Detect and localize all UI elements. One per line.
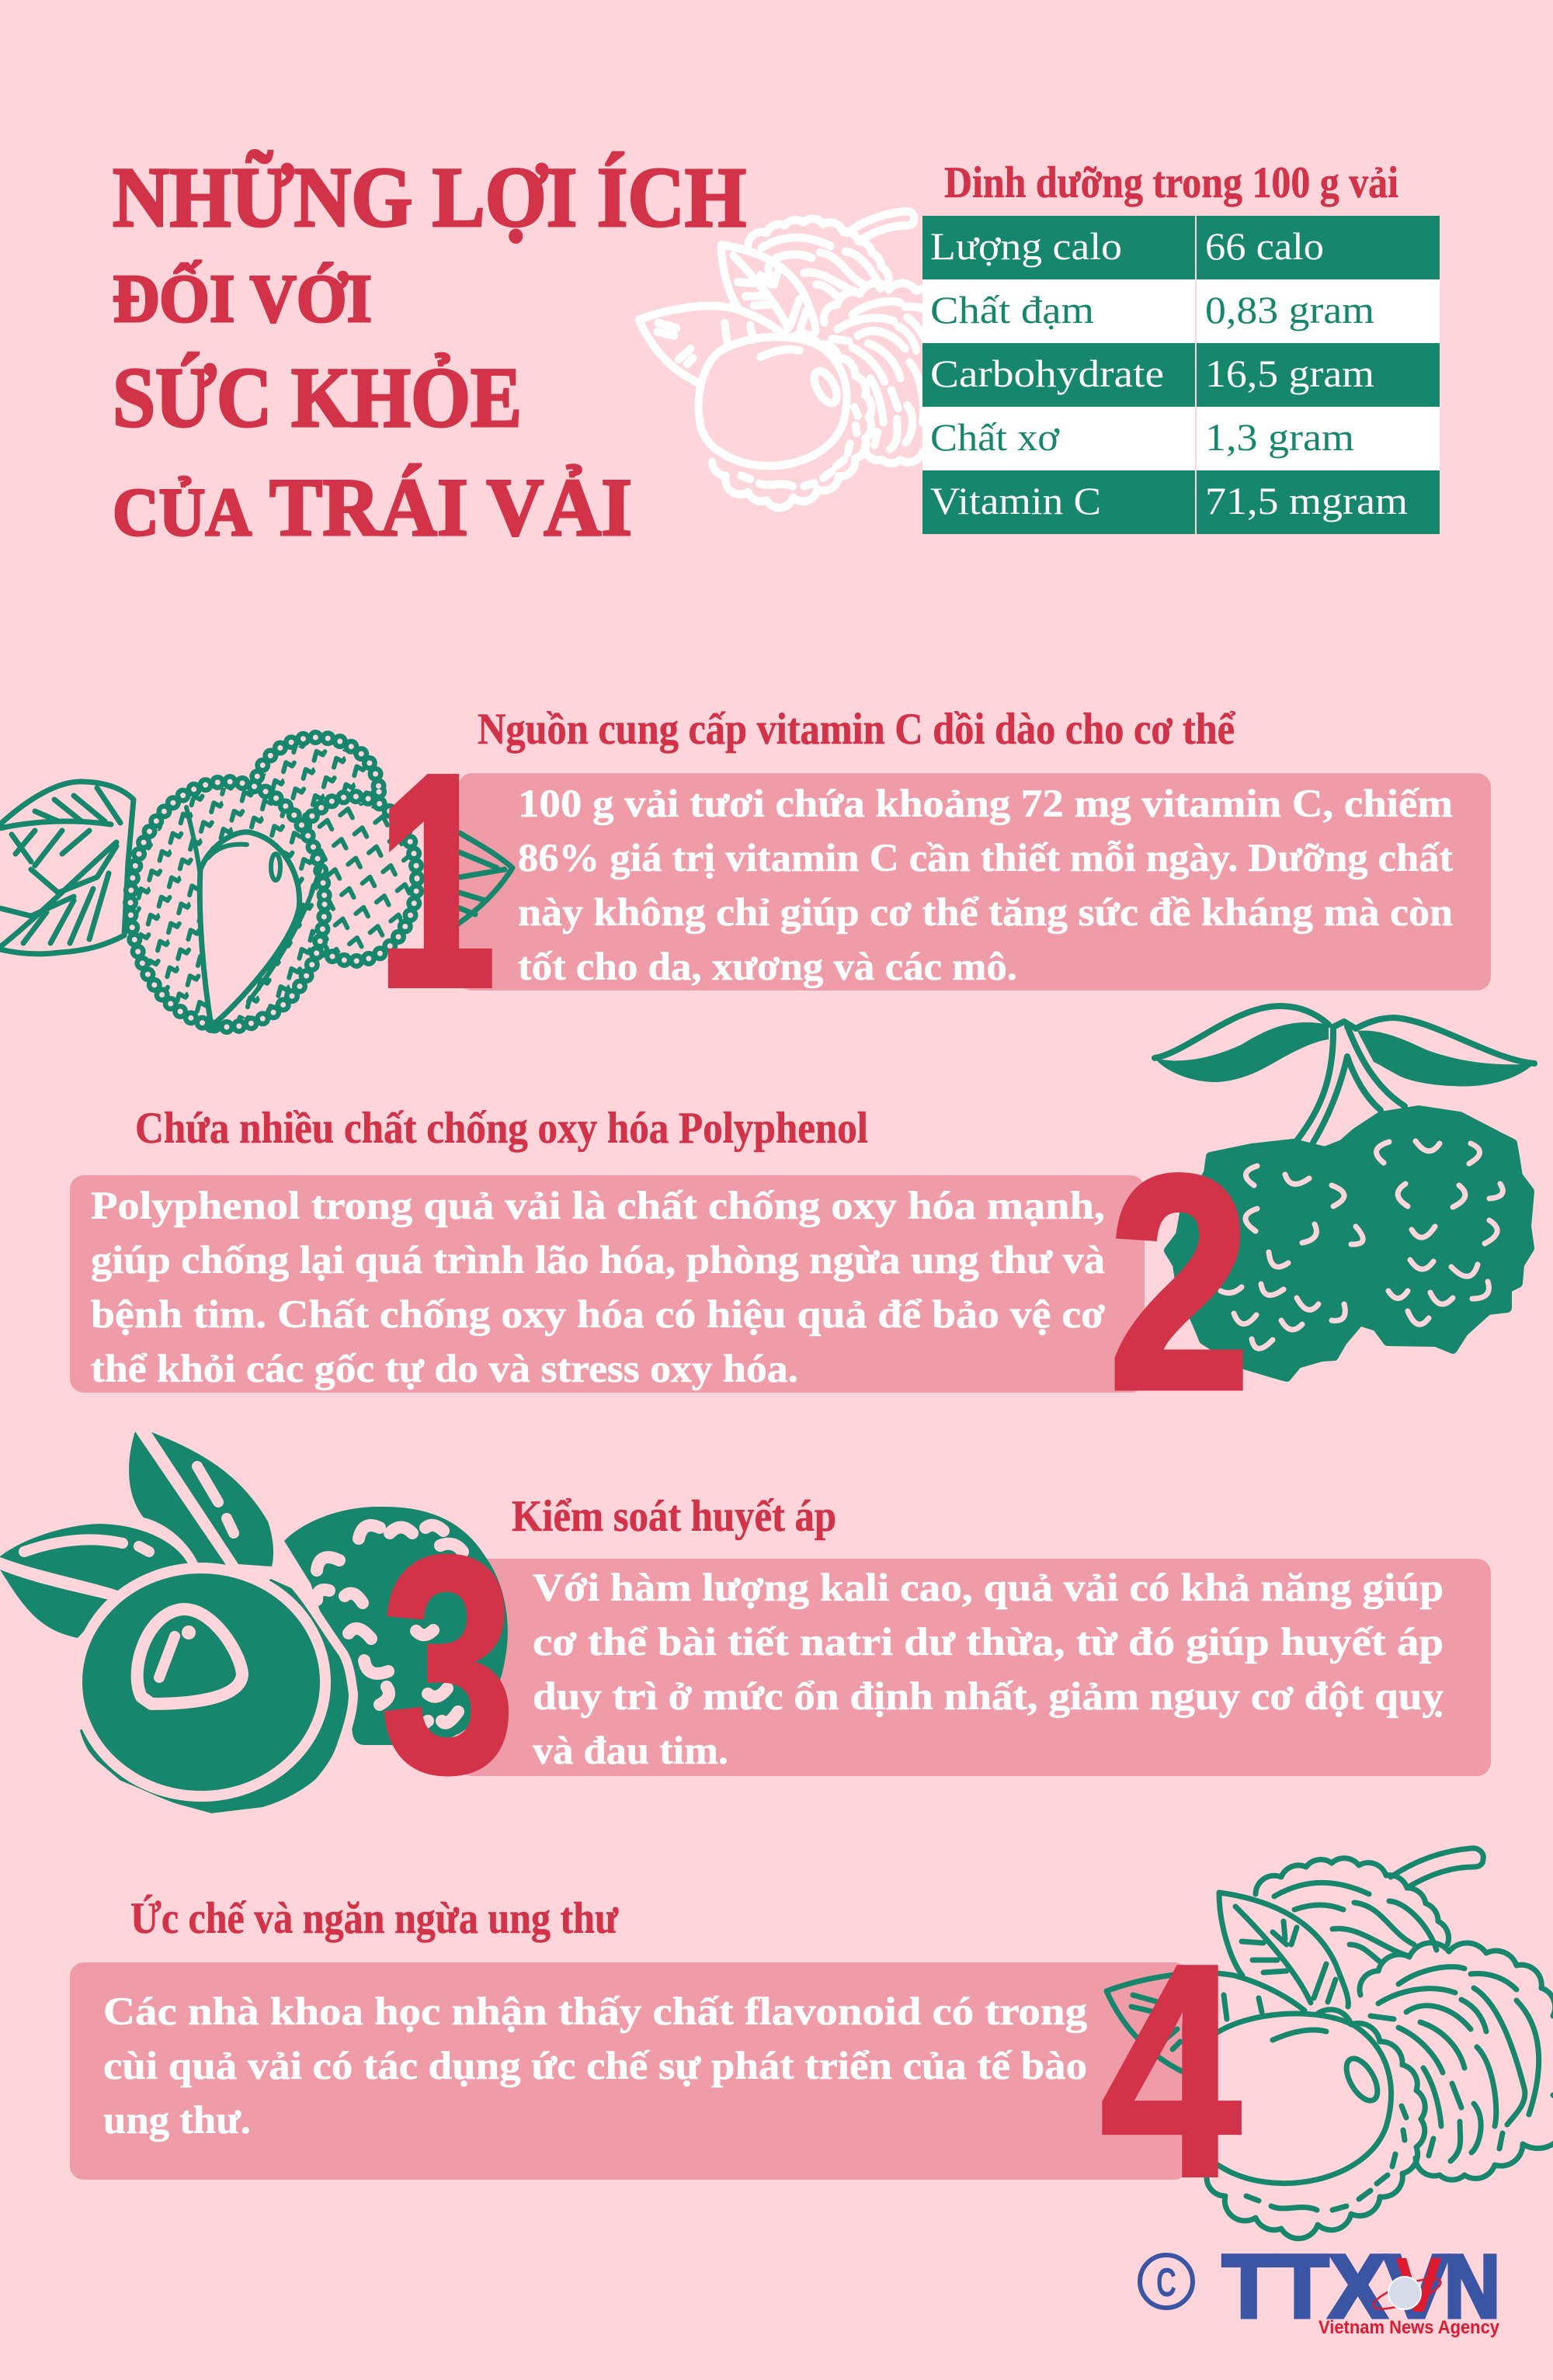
title: [113, 150, 746, 553]
icon: back fruit: [284, 1507, 508, 1745]
icon: lychee flesh: [200, 832, 300, 1026]
logo wordmark: V: [1384, 2237, 1449, 2337]
icon: globe: [1371, 2273, 1444, 2315]
body text 3: duy trì ở mức ổn định nhất, giảm nguy cơ đột quỵ: [533, 1675, 1444, 1719]
table: nutrition per 100 g: 66 calo: [1205, 224, 1324, 268]
heading 3: Kiểm soát huyết áp: [512, 1492, 836, 1541]
heading: nutrition table: Dinh dưỡng trong 100 g vải: [944, 158, 1398, 207]
table: nutrition per 100 g: Vitamin C: [930, 479, 1101, 522]
number 4: 4: [1100, 1901, 1243, 2241]
table: nutrition per 100 g: 71,5 mgram: [1205, 479, 1408, 522]
body text 1: 100 g vải tươi chứa khoảng 72 mg vitamin C, chiếm: [518, 782, 1453, 826]
logo: TTXVN copyright: [1140, 2237, 1500, 2338]
body text 3: và đau tim.: [533, 1729, 728, 1773]
icon: leaves: [0, 1431, 273, 1638]
title: TRÁI VẢI: [269, 462, 632, 553]
table: nutrition per 100 g: Chất xơ: [930, 415, 1060, 459]
number 3: 3: [380, 1493, 516, 1836]
body text 3: Với hàm lượng kali cao, quả vải có khả năng giúp: [533, 1566, 1444, 1610]
panel: section 2: [70, 1006, 1534, 1452]
text box 1: [458, 773, 1491, 991]
body text 4: cùi quả vải có tác dụng ức chế sự phát triển của tế bào: [103, 2045, 1087, 2088]
body text 2: giúp chống lại quá trình lão hóa, phòng ngừa ung thư và: [91, 1239, 1105, 1282]
logo tagline: Vietnam News Agency: [1318, 2317, 1500, 2338]
table: nutrition per 100 g: Chất đạm: [930, 288, 1094, 331]
body text 4: Các nhà khoa học nhận thấy chất flavonoid có trong: [103, 1990, 1087, 2034]
body text 1: này không chỉ giúp cơ thể tăng sức đề kháng mà còn: [518, 891, 1453, 935]
icon: outlined lychee cluster: [1107, 1848, 1553, 2239]
body text 2: thể khỏi các gốc tự do và stress oxy hóa.: [91, 1348, 798, 1391]
icon: white lychee behind the table: [639, 211, 975, 508]
table: nutrition per 100 g: Lượng calo: [930, 224, 1122, 268]
heading 1: Nguồn cung cấp vitamin C dồi dào cho cơ thể: [478, 705, 1235, 754]
body text 1: tốt cho da, xương và các mô.: [518, 945, 1017, 989]
icon: outlined lychee cluster: [0, 737, 512, 1033]
title: ĐỐI VỚI: [113, 259, 372, 337]
body text 1: 86% giá trị vitamin C cần thiết mỗi ngày. Dưỡng chất: [518, 837, 1453, 880]
text box 2: [70, 1175, 1145, 1393]
icon: solid green lychees with leaves: [1155, 1006, 1534, 1377]
heading 2: Chứa nhiều chất chống oxy hóa Polyphenol: [135, 1104, 868, 1153]
body text 2: Polyphenol trong quả vải là chất chống oxy hóa mạnh,: [91, 1185, 1105, 1228]
body text 3: cơ thể bài tiết natri dư thừa, từ đó giúp huyết áp: [533, 1621, 1444, 1664]
title: SỨC KHỎE: [113, 350, 522, 445]
table: nutrition per 100 g: 16,5 gram: [1205, 352, 1374, 395]
icon: front fruit: [75, 1568, 353, 1818]
table: nutrition per 100 g: 1,3 gram: [1205, 415, 1354, 459]
logo wordmark: TTX: [1222, 2237, 1387, 2337]
text box 3: [458, 1559, 1491, 1776]
logo wordmark: N: [1444, 2237, 1500, 2337]
table: nutrition per 100 g: [922, 216, 1440, 534]
icon: copyright mark: C: [1156, 2260, 1176, 2305]
title: NHỮNG LỢI ÍCH: [113, 150, 746, 245]
body text 4: ung thư.: [103, 2099, 251, 2142]
number 1: 1: [378, 714, 495, 1047]
text box 4: [70, 1962, 1188, 2180]
icon: solid green lychee, cut open: [0, 1431, 508, 1818]
table: nutrition per 100 g: 0,83 gram: [1205, 288, 1374, 331]
body text 2: [91, 1185, 1105, 1391]
body text 4: [103, 1990, 1087, 2142]
panel: section 3: [0, 1431, 1491, 1836]
body text 3: [533, 1566, 1444, 1773]
logo wordmark: [1222, 2237, 1500, 2337]
table: nutrition per 100 g: Carbohydrate: [930, 352, 1164, 395]
body text 1: [518, 782, 1453, 989]
logo wordmark: V: [1395, 2242, 1442, 2329]
panel: section 1: [0, 705, 1491, 1047]
body text 2: bệnh tim. Chất chống oxy hóa có hiệu quả để bảo vệ cơ: [91, 1293, 1105, 1337]
number 2: 2: [1109, 1113, 1250, 1452]
panel: section 4: [70, 1848, 1553, 2241]
heading 4: Ức chế và ngăn ngừa ung thư: [130, 1894, 619, 1943]
title: CỦA: [113, 475, 252, 550]
icon: copyright mark: [1140, 2255, 1193, 2308]
